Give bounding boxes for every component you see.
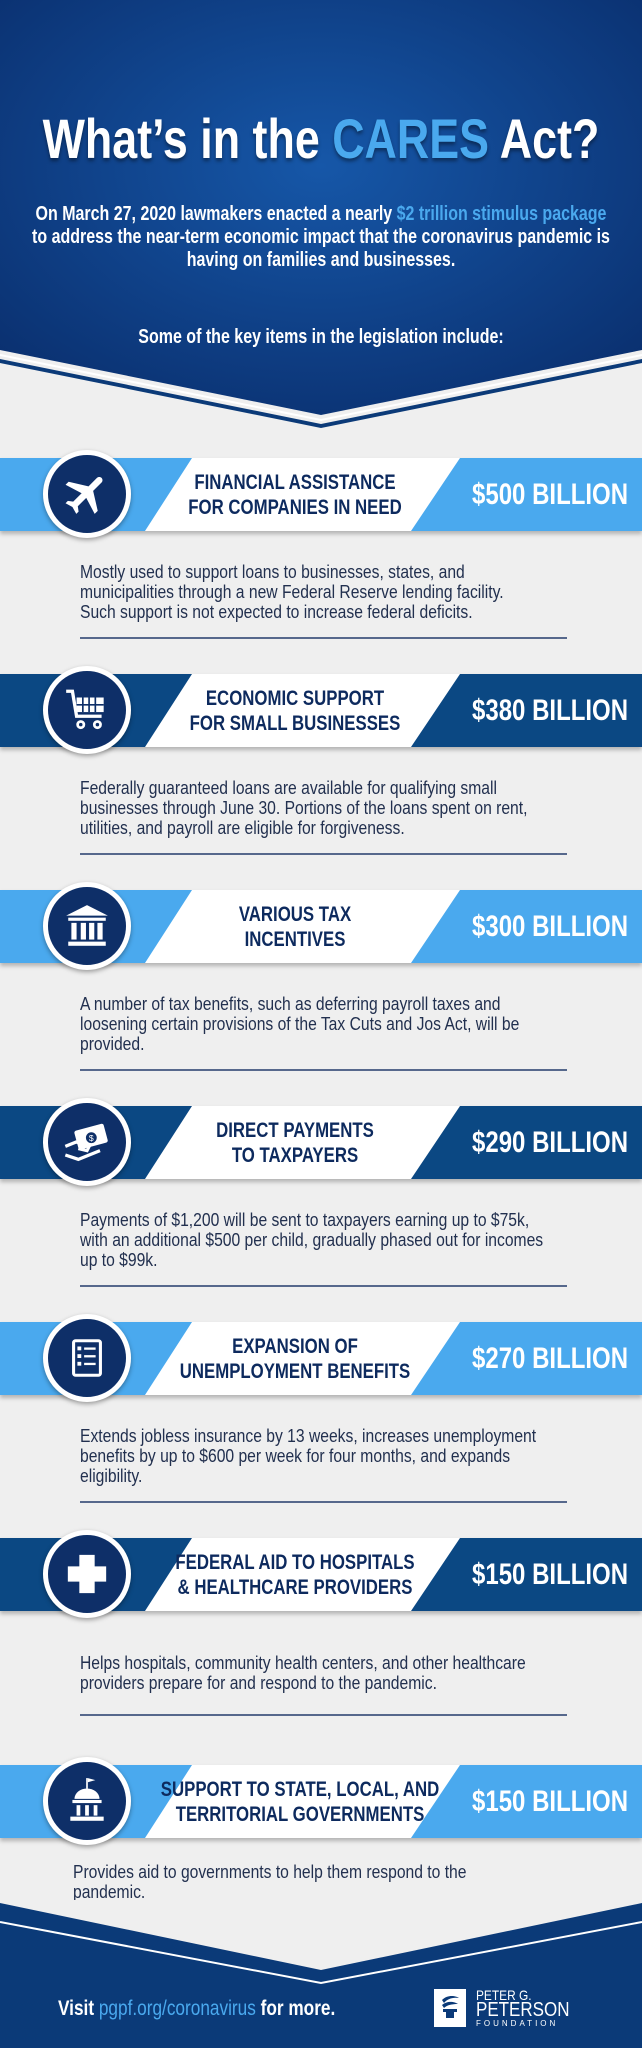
description 6 — [80, 1653, 526, 1693]
section 1: band: FOR COMPANIES IN NEED — [188, 496, 402, 518]
section 4: band: $290 BILLION — [472, 1126, 628, 1158]
intro text — [32, 203, 610, 271]
description 2 — [80, 778, 527, 838]
section 4: band: DIRECT PAYMENTS — [216, 1118, 374, 1142]
description 4: up to $99k. — [80, 1250, 157, 1270]
description 2: Federally guaranteed loans are available for qualifying small — [80, 778, 497, 798]
section 1: band: FINANCIAL ASSISTANCE — [194, 470, 396, 494]
section 2: band: $380 BILLION — [472, 694, 628, 726]
section 6: band: $150 BILLION — [472, 1558, 628, 1590]
section 6: band: FEDERAL AID TO HOSPITALS — [175, 1550, 415, 1574]
description 7: pandemic. — [73, 1882, 145, 1902]
description 1: municipalities through a new Federal Reserve lending facility. — [80, 582, 504, 602]
intro text: to address the near-term economic impact that the coronavirus pandemic is — [32, 226, 610, 248]
section 4: band — [0, 1106, 642, 1179]
logo: Peter G. Peterson Foundation: FOUNDATION — [476, 2019, 558, 2028]
section 4: band: TO TAXPAYERS — [232, 1144, 358, 1166]
section 5: band: EXPANSION OF — [232, 1334, 358, 1358]
section 6: band — [0, 1538, 642, 1611]
description 1: Such support is not expected to increase federal deficits. — [80, 602, 473, 622]
description 1: Mostly used to support loans to businesses, states, and — [80, 562, 465, 582]
description 6: providers prepare for and respond to the pandemic. — [80, 1673, 437, 1693]
description 5: Extends jobless insurance by 13 weeks, increases unemployment — [80, 1426, 536, 1446]
section 1: band: $500 BILLION — [472, 478, 628, 510]
subheading: Some of the key items in the legislation include: — [138, 326, 504, 348]
footer link text: Visit pgpf.org/coronavirus for more. — [58, 1997, 335, 2020]
description 2: utilities, and payroll are eligible for forgiveness. — [80, 818, 405, 838]
description 4: Payments of $1,200 will be sent to taxpayers earning up to $75k, — [80, 1210, 529, 1230]
header background — [0, 0, 642, 428]
icon: money hand: $ — [89, 1133, 94, 1143]
description 5: benefits by up to $600 per week for four months, and expands — [80, 1446, 510, 1466]
section 7: band: SUPPORT TO STATE, LOCAL, AND — [161, 1778, 439, 1800]
description 1 — [80, 562, 504, 622]
intro text: having on families and businesses. — [187, 249, 455, 271]
icon: bank — [43, 882, 131, 970]
section 3: band: $300 BILLION — [472, 910, 628, 942]
footer background — [0, 1900, 642, 2048]
icon: checklist — [43, 1314, 131, 1402]
logo: Peter G. Peterson Foundation — [434, 1987, 570, 2028]
icon: capitol — [43, 1757, 131, 1845]
section 2: band: FOR SMALL BUSINESSES — [190, 712, 400, 734]
description 5: eligibility. — [80, 1466, 142, 1486]
title: What’s in the CARES Act? — [43, 107, 599, 170]
section 7: band: $150 BILLION — [472, 1784, 628, 1818]
icon: money hand — [43, 1098, 131, 1186]
icon: airplane — [43, 450, 131, 538]
description 3: provided. — [80, 1034, 144, 1054]
section 7: band: TERRITORIAL GOVERNMENTS — [176, 1802, 424, 1826]
section 1: band — [0, 458, 642, 531]
section 6: band: & HEALTHCARE PROVIDERS — [178, 1576, 412, 1598]
icon: medical cross — [43, 1530, 131, 1618]
description 3: loosening certain provisions of the Tax Cuts and Jos Act, will be — [80, 1014, 519, 1034]
section 5: band: UNEMPLOYMENT BENEFITS — [180, 1360, 410, 1382]
description 3 — [80, 994, 519, 1054]
section 3: band: VARIOUS TAX — [239, 902, 351, 926]
section 3: band: INCENTIVES — [245, 928, 345, 950]
description 5 — [80, 1426, 536, 1486]
description 7 — [73, 1862, 466, 1902]
logo: Peter G. Peterson Foundation: PETER G. — [476, 1987, 532, 2003]
section 7: band — [0, 1765, 642, 1838]
description 3: A number of tax benefits, such as deferring payroll taxes and — [80, 994, 500, 1014]
section 5: band — [0, 1322, 642, 1395]
section 3: band — [0, 890, 642, 963]
description 4: with an additional $500 per child, gradually phased out for incomes — [80, 1230, 543, 1250]
description 7: Provides aid to governments to help them respond to the — [73, 1862, 466, 1882]
section 2: band — [0, 674, 642, 747]
logo: Peter G. Peterson Foundation: PETERSON — [476, 1999, 570, 2021]
description 6: Helps hospitals, community health centers, and other healthcare — [80, 1653, 526, 1673]
description 4 — [80, 1210, 543, 1270]
icon: cart — [43, 666, 131, 754]
intro text: On March 27, 2020 lawmakers enacted a nearly $2 trillion stimulus package — [36, 203, 606, 225]
section 2: band: ECONOMIC SUPPORT — [206, 686, 384, 710]
section 5: band: $270 BILLION — [472, 1342, 628, 1374]
description 2: businesses through June 30. Portions of the loans spent on rent, — [80, 798, 527, 818]
